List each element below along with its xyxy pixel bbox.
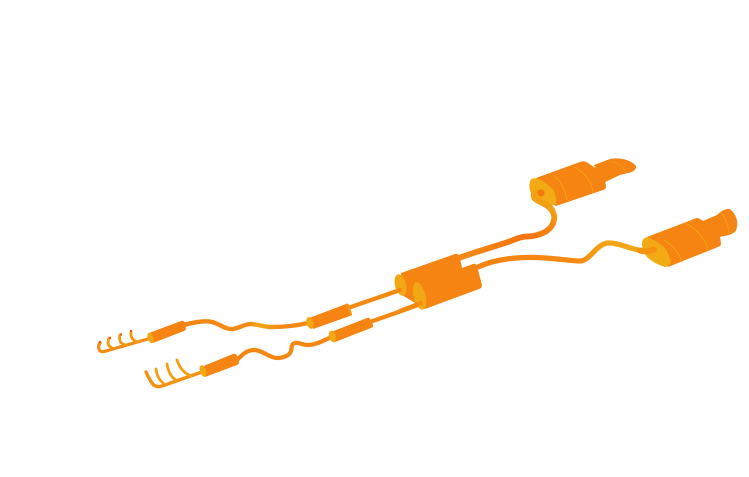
left exhaust manifold: upper [99,330,148,352]
pipe bend over upper muffler cap [534,192,552,210]
resonator: lower middle [327,318,373,343]
resonator: lower left [198,354,239,378]
upper muffler pipe outlet [538,190,544,196]
muffler end cap [642,237,671,267]
upper pipe run: left wavy section [183,321,308,329]
centre muffler pair [380,254,482,311]
tailpipe: upper rear [594,158,636,183]
rear muffler: upper [529,161,606,208]
lower pipe run: left wavy section [236,337,332,361]
rear muffler: lower [640,218,721,267]
resonator: upper middle [305,304,352,330]
straight pipe: lower middle [370,303,424,322]
straight pipe: upper middle [348,290,400,308]
muffler end cap [529,178,556,208]
pipe outlet [640,250,654,251]
centre muffler inlet: upper [380,273,408,297]
left exhaust manifold: lower [146,360,202,387]
tailpipe: lower rear [703,209,737,238]
pipe to lower rear muffler [478,243,655,267]
resonator: upper left [146,321,186,344]
centre muffler inlet: lower [400,281,429,311]
pipe to upper rear muffler [459,199,554,258]
